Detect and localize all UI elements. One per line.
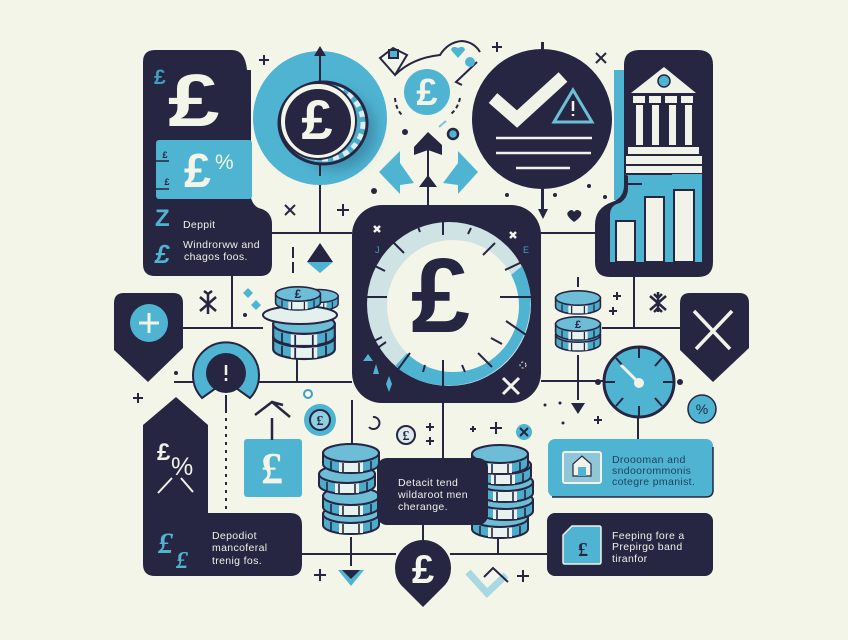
block: pound percent: £ bbox=[162, 150, 168, 160]
icon: small pound coin bbox=[304, 390, 379, 436]
icon: small pound token: £ bbox=[402, 429, 410, 444]
icon: top small pound coin: £ bbox=[416, 72, 438, 114]
icon: centre pound: £ bbox=[411, 237, 470, 355]
panel: blue note: Droooman and bbox=[612, 454, 686, 466]
panel: centre gauge: E bbox=[523, 245, 529, 255]
panel: bank and chart bbox=[595, 50, 713, 277]
icon: top links bbox=[371, 41, 480, 194]
icon: dots bbox=[243, 184, 607, 424]
panel: dark note: tiranfor bbox=[612, 553, 648, 565]
panel: dark note: Feeping fore a bbox=[612, 530, 685, 542]
icon: checkmark circle bbox=[472, 42, 612, 219]
icon: navy notch bbox=[342, 570, 360, 579]
icon: clock bbox=[595, 347, 683, 417]
icon: warning gauge bbox=[174, 342, 259, 398]
panel: centre gauge: J bbox=[375, 245, 380, 255]
coins: right stack: £ bbox=[575, 319, 581, 331]
panel: dark note bbox=[547, 513, 713, 576]
icon: bank bbox=[626, 67, 702, 173]
panel: dark note: Prepirgo band bbox=[612, 541, 683, 553]
text: deposit note: mancoferal bbox=[212, 542, 267, 554]
icon: percent badge bbox=[688, 395, 716, 423]
bar chart bbox=[616, 190, 694, 262]
icon: plus marks bbox=[133, 205, 621, 582]
icon: teal cross bbox=[516, 424, 532, 440]
card: pound tile bbox=[244, 402, 302, 497]
panel: blue note: sndoorommonis bbox=[612, 465, 691, 477]
panel: centre gauge bbox=[352, 205, 541, 410]
text: withdrawal: Windrorww and bbox=[183, 239, 260, 251]
text: deposit note: Depodiot bbox=[212, 530, 257, 542]
card: pound tile: £ bbox=[261, 444, 283, 493]
panel: blue note: cotegre pmanist. bbox=[612, 476, 695, 488]
panel: centre caption: Detacit tend bbox=[398, 477, 458, 489]
icon: map pin pound bbox=[395, 540, 451, 607]
panel: centre caption: wildaroot men bbox=[397, 489, 468, 501]
icon: house card bbox=[563, 452, 601, 483]
coins: lower right stack bbox=[472, 445, 533, 538]
icon: triangle dial bbox=[293, 243, 333, 273]
icon: Z: Z bbox=[155, 205, 170, 232]
coins: left stack: £ bbox=[295, 287, 302, 301]
block: pound percent: % bbox=[215, 151, 234, 174]
text: deposit: Deppit bbox=[183, 219, 215, 231]
text: deposit note: trenig fos. bbox=[212, 555, 262, 567]
panel: lower left fees: % bbox=[171, 453, 193, 481]
panel: blue note bbox=[548, 439, 713, 497]
arrows: centre left and right bbox=[379, 132, 478, 194]
icon: small pound: £ bbox=[154, 66, 166, 89]
icon: right snowflake bbox=[650, 292, 666, 312]
panel: centre caption bbox=[377, 458, 488, 525]
coins: left stack bbox=[263, 287, 338, 359]
panel: lower left fees bbox=[143, 397, 302, 576]
icon: teal pounds bbox=[157, 527, 189, 574]
icon: large pound: £ bbox=[168, 59, 219, 142]
coins: lower left stack bbox=[319, 444, 379, 534]
panel: lower left fees: £ bbox=[157, 439, 171, 466]
icon: left snowflake bbox=[200, 291, 216, 314]
icon: small pound token bbox=[397, 426, 415, 444]
panel: centre caption: cherange. bbox=[398, 501, 448, 513]
icon: heart bbox=[567, 210, 581, 222]
icon: down chevron bbox=[338, 570, 364, 586]
block: pound percent bbox=[156, 140, 252, 199]
icon: percent badge: % bbox=[696, 401, 708, 417]
panel: left shield bbox=[114, 293, 183, 382]
block: pound percent: £ bbox=[184, 145, 211, 198]
icon: map pin pound: £ bbox=[412, 548, 434, 592]
icon: document bbox=[563, 526, 601, 564]
icon: teal pounds: £ bbox=[175, 548, 189, 574]
icon: check outline bbox=[468, 568, 508, 593]
icon: coin circle bbox=[253, 46, 387, 185]
connector lines bbox=[174, 42, 680, 566]
icon: document: £ bbox=[578, 539, 588, 561]
icon: coin circle: £ bbox=[301, 88, 333, 151]
panel: right shield bbox=[680, 293, 749, 382]
coins: right stack bbox=[556, 291, 600, 414]
text: withdrawal: chagos foos. bbox=[184, 251, 248, 263]
block: pound percent: £ bbox=[164, 177, 170, 187]
panel: left top fees bbox=[143, 50, 272, 276]
icon: plus top bbox=[259, 42, 606, 216]
icon: teal pounds: £ bbox=[157, 527, 174, 560]
icon: top small pound coin bbox=[395, 69, 460, 116]
icon: f pound: £ bbox=[154, 239, 170, 269]
icon: small diamonds bbox=[243, 288, 261, 310]
icon: small pound coin: £ bbox=[316, 414, 324, 429]
